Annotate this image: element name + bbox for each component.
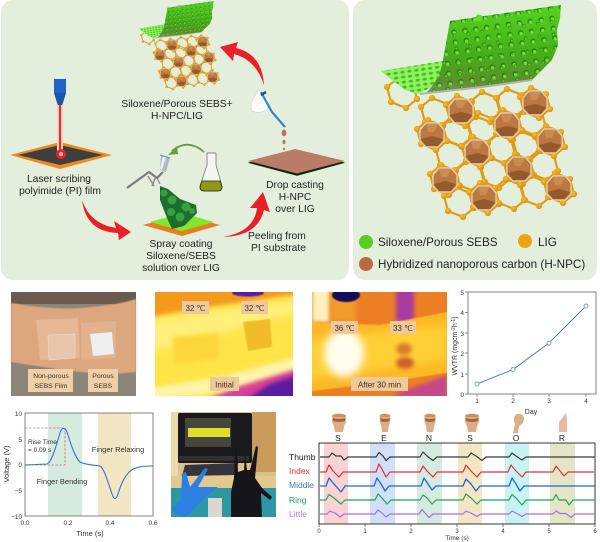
label: 36 C bbox=[331, 321, 358, 334]
legend bbox=[359, 234, 585, 271]
hand signs: SENSOR: S bbox=[335, 433, 341, 443]
chart: finger sign language signals: Middle bbox=[289, 480, 314, 490]
signal: middle bbox=[320, 478, 595, 492]
chart: voltage response: = 0.09 s bbox=[28, 447, 52, 454]
chart: voltage response: 0 bbox=[18, 462, 22, 469]
icon: laser scribing film bbox=[10, 79, 112, 169]
icon: siloxene porous SEBS sheet bbox=[381, 5, 561, 94]
chart: finger sign language signals: 2 bbox=[409, 529, 413, 535]
legend: Hybridized nanoporous carbon (H-NPC) bbox=[378, 258, 585, 271]
label: laser scribing: polyimide (PI) film bbox=[19, 186, 101, 197]
chart: WVTR vs day: 0 bbox=[460, 392, 464, 399]
hand signs: SENSOR: S bbox=[467, 433, 473, 443]
chart: WVTR vs day: -1 bbox=[451, 319, 457, 323]
chart: finger sign language signals: 5 bbox=[547, 529, 551, 535]
chart: WVTR vs day: 3 bbox=[460, 331, 464, 338]
chart: WVTR vs day: WVTR (mgcm bbox=[452, 332, 459, 376]
icon: pipette and drops bbox=[251, 90, 286, 150]
arrow: spray to drop casting bbox=[223, 192, 270, 237]
chart: finger sign language signals: 4 bbox=[501, 529, 505, 535]
label: non-porous film bbox=[28, 369, 73, 392]
label: porous film: SEBS bbox=[94, 383, 113, 390]
hand signs: SENSOR: N bbox=[426, 433, 432, 443]
icon: drop cast plate bbox=[248, 149, 345, 176]
chart: WVTR vs day: 4 bbox=[460, 310, 464, 317]
chart: WVTR vs day: ) bbox=[452, 316, 459, 319]
label: 32 C right: 32 ℃ bbox=[244, 304, 265, 313]
chart: finger sign language signals: 6 bbox=[593, 529, 597, 535]
icon: lattice with nanoporous carbon bbox=[384, 75, 577, 220]
chart: WVTR vs day: h bbox=[452, 323, 459, 327]
label: drop casting: Drop casting bbox=[266, 180, 324, 191]
arrow: drop casting to final device bbox=[220, 42, 264, 85]
chart: voltage response: 0.0 bbox=[20, 520, 30, 527]
chart: WVTR vs day: -2 bbox=[451, 327, 457, 332]
signal: ring bbox=[320, 494, 595, 505]
hand signs: SENSOR: R bbox=[559, 433, 565, 443]
chart: finger sign language signals: Little bbox=[289, 509, 307, 519]
signal: index bbox=[320, 464, 594, 477]
label: 36 C: 36 ℃ bbox=[334, 324, 355, 333]
panel: device structure bbox=[353, 0, 597, 280]
photo: glove and robotic hand bbox=[171, 412, 276, 517]
label: non-porous film: Non-porous bbox=[33, 373, 69, 380]
icon: blue glove bbox=[172, 468, 218, 517]
chart: WVTR vs day: Day bbox=[525, 409, 538, 416]
label: peeling: Peeling from bbox=[248, 231, 306, 242]
label: initial bbox=[210, 377, 239, 391]
hand signs: SENSOR: O bbox=[513, 433, 520, 443]
label: 32 C left bbox=[182, 301, 209, 314]
label: final device: H-NPC/LIG bbox=[151, 111, 203, 122]
legend: Siloxene/Porous SEBS bbox=[378, 236, 498, 249]
label: peeling: PI substrate bbox=[251, 243, 306, 254]
chart: finger sign language signals: 1 bbox=[363, 529, 367, 535]
label: laser scribing: Laser scribing bbox=[27, 174, 91, 185]
chart: voltage response: Finger Bending bbox=[37, 477, 87, 486]
photo: patches on arm bbox=[11, 292, 136, 396]
label: after 30 min bbox=[351, 377, 408, 391]
chart: voltage response: 0.4 bbox=[105, 520, 115, 527]
label: final device: Siloxene/Porous SEBS+ bbox=[121, 99, 233, 110]
label: non-porous film: SEBS Film bbox=[35, 383, 68, 390]
chart: voltage response: −10 bbox=[11, 514, 22, 521]
hand signs: SENSOR: E bbox=[381, 433, 387, 443]
label: drop casting: over LIG bbox=[275, 204, 315, 215]
chart: finger sign language signals: Time (s) bbox=[445, 535, 469, 542]
icon: spray plate and plume bbox=[143, 186, 220, 236]
chart: voltage response: Voltage (V) bbox=[2, 445, 11, 483]
chart: finger sign language signals: 0 bbox=[317, 529, 321, 535]
label: spray coating: Siloxene/SEBS bbox=[146, 251, 216, 262]
chart: voltage response: 0.2 bbox=[63, 520, 73, 527]
chart: finger sign language signals: 3 bbox=[455, 529, 459, 535]
icon: spray gun and flask bbox=[127, 145, 222, 191]
chart: voltage response: Time (s) bbox=[76, 529, 104, 538]
label: porous film: Porous bbox=[92, 373, 114, 380]
label: spray coating: Spray coating bbox=[150, 239, 213, 250]
label: drop casting: H-NPC bbox=[279, 192, 312, 203]
label: spray coating: solution over LIG bbox=[142, 263, 220, 274]
signal: thumb bbox=[320, 452, 595, 460]
icon: robotic hand bbox=[231, 446, 272, 517]
signal: little bbox=[320, 510, 595, 518]
thermal image: after 30 min bbox=[305, 288, 452, 400]
label: after 30 min: After 30 min bbox=[358, 380, 401, 390]
chart: voltage response: −5 bbox=[15, 488, 22, 495]
label: initial: Initial bbox=[215, 380, 234, 390]
chart: WVTR vs day: 2 bbox=[511, 398, 515, 405]
chart: voltage response: 0.6 bbox=[148, 520, 158, 527]
label: 33 C: 33 ℃ bbox=[393, 324, 413, 333]
chart: finger sign language signals bbox=[289, 443, 597, 542]
arrow: laser to spray bbox=[82, 200, 131, 240]
thermal image: initial bbox=[150, 285, 300, 400]
chart: voltage response bbox=[2, 411, 158, 538]
chart: finger sign language signals: Ring bbox=[289, 495, 307, 505]
chart: WVTR vs day: 1 bbox=[475, 398, 479, 405]
chart: WVTR vs day: 2 bbox=[460, 351, 464, 358]
chart: WVTR vs day: 5 bbox=[460, 290, 464, 297]
chart: voltage response: Rise Time bbox=[28, 439, 57, 446]
chart: voltage response: Finger Relaxing bbox=[92, 445, 144, 454]
chart: WVTR vs day bbox=[451, 290, 596, 416]
label: 32 C left: 32 ℃ bbox=[185, 304, 206, 313]
panel: fabrication process bbox=[1, 0, 349, 280]
label: 32 C right bbox=[241, 301, 268, 314]
legend: LIG bbox=[538, 236, 557, 249]
label: porous film bbox=[88, 369, 118, 392]
chart: voltage response: 5 bbox=[18, 437, 22, 444]
chart: WVTR vs day: 4 bbox=[584, 398, 588, 405]
chart: finger sign language signals: Thumb bbox=[289, 452, 316, 462]
hand signs: SENSOR bbox=[332, 412, 567, 443]
chart: voltage response: 10 bbox=[15, 411, 22, 418]
chart: WVTR vs day: 3 bbox=[547, 398, 551, 405]
chart: WVTR vs day: 1 bbox=[460, 372, 464, 379]
chart: finger sign language signals: Index bbox=[289, 466, 311, 476]
label: 33 C bbox=[390, 321, 416, 334]
icon: final device small bbox=[139, 1, 220, 90]
